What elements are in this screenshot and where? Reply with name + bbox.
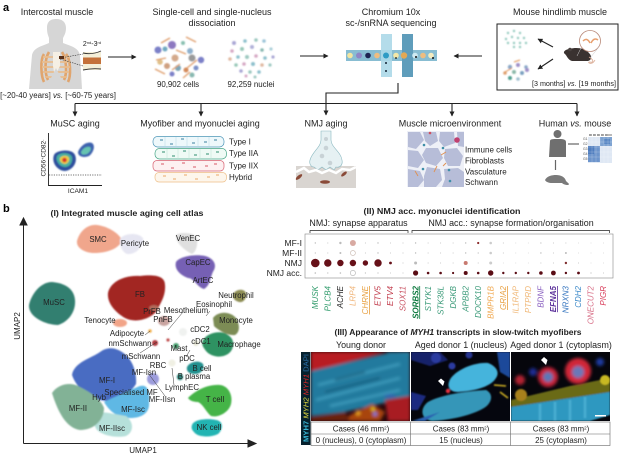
column title: young: Young donor	[336, 340, 386, 350]
cluster labels: Pericyte	[121, 239, 149, 248]
plot frame	[305, 234, 613, 278]
heading: MuSC aging: MuSC aging	[50, 118, 100, 128]
fiber: type IIA	[155, 148, 226, 159]
panel: UMAP atlas	[13, 209, 261, 455]
gene labels: CHRNE	[361, 285, 370, 314]
cluster labels: SMC	[89, 235, 107, 244]
cluster labels: ArtEC	[193, 276, 214, 285]
y label: CD82	[40, 140, 48, 158]
cluster labels: Macrophage	[217, 340, 261, 349]
fiber: type IIX	[153, 160, 224, 171]
gene labels: SOX11	[399, 286, 408, 311]
gene labels: STYK1	[424, 286, 433, 311]
cluster labels: Eosinophil	[196, 300, 232, 309]
icon: neuromuscular junction	[295, 131, 356, 188]
gene labels: IL1RAP	[512, 285, 520, 314]
heading: intercostal muscle: Intercostal muscle	[21, 7, 93, 17]
gene labels	[311, 285, 608, 324]
label: vasculature: Vasculature	[465, 168, 507, 176]
cluster labels: MF-Isc	[121, 405, 145, 414]
axis label UMAP2: UMAP2	[13, 312, 22, 340]
brackets	[310, 230, 610, 233]
label: fibroblasts: Fibroblasts	[465, 156, 504, 166]
panel label b: b	[3, 203, 10, 215]
panel: intercostal muscle	[0, 7, 116, 100]
table row 1: 2	[484, 426, 487, 430]
gene labels: BMPR1B	[486, 285, 495, 319]
gene labels: PLCB4	[324, 285, 332, 311]
table row 2: 0 (nucleus), 0 (cytoplasm)	[316, 436, 407, 445]
cluster labels: cDC2	[190, 325, 210, 334]
gene labels: EFNA5	[549, 285, 558, 312]
gene labels: NRXN3	[562, 285, 571, 313]
panel: human vs mouse	[539, 118, 612, 185]
gene labels: ETV5	[374, 285, 383, 306]
column title: aged cytoplasm: Aged donor 1 (cytoplasm)	[510, 340, 612, 350]
cluster labels: PrFB	[143, 307, 161, 316]
heading line 2: dissociation	[188, 18, 236, 28]
gene labels: ACHE	[336, 285, 345, 309]
row labels	[267, 238, 302, 278]
row labels: MF-I	[285, 238, 302, 248]
UMAP clusters	[29, 225, 246, 437]
icon: nuclei cloud	[228, 38, 275, 78]
panel: myofiber aging	[140, 118, 260, 182]
gene labels: MUSK	[311, 285, 320, 309]
table row 2: 15 (nucleus)	[439, 436, 483, 445]
panel label a: a	[3, 2, 10, 14]
label: rib level: 2	[83, 41, 87, 48]
channel legend strip: MYH7 MYH2 MYH1 DAPI	[304, 354, 310, 442]
cluster labels: MF-IIsn	[149, 395, 175, 404]
fiber: hybrid	[155, 172, 226, 182]
link human heatmap	[568, 143, 579, 145]
label: rib level: nd	[87, 40, 91, 45]
cluster labels: cDC1	[191, 337, 211, 346]
label: type IIA: Type IIA	[229, 149, 259, 158]
arrow	[300, 55, 328, 57]
cluster labels: NK cell	[197, 423, 222, 432]
heading: chromium: Chromium 10x	[362, 7, 421, 17]
panel: muscle microenvironment	[399, 118, 512, 187]
table row 2: 25 (cytoplasm)	[535, 436, 587, 445]
icon: muscle cross-section	[407, 131, 464, 187]
cluster labels: Specialised MF	[104, 388, 158, 397]
cluster labels: MF-IIsc	[99, 424, 125, 433]
micrograph: young donor	[311, 352, 410, 421]
gene labels: DGKB	[449, 285, 458, 309]
cluster labels: Neutrophil	[218, 291, 254, 300]
y label: -	[40, 139, 45, 141]
cluster labels	[43, 234, 261, 433]
table row 1: )	[387, 424, 390, 434]
icon: human torso with ribs	[29, 19, 83, 89]
panel: mouse hindlimb	[497, 7, 618, 90]
cluster labels: pDC	[179, 354, 195, 363]
gene labels: CDH2	[574, 285, 583, 308]
cluster labels: B cell	[192, 364, 212, 373]
icon: gray mouse	[545, 175, 569, 185]
channel legend strip	[301, 352, 310, 445]
cluster labels: Hyb	[92, 393, 107, 402]
axis label UMAP1: UMAP1	[129, 446, 157, 455]
micrograph: aged cytoplasm	[511, 352, 610, 421]
scale bar	[595, 415, 606, 416]
heading: NMJ aging: NMJ aging	[304, 118, 348, 128]
arrow up-left	[538, 39, 553, 47]
group label: apparatus: NMJ: synapse apparatus	[309, 218, 408, 228]
panel: dot plot	[267, 207, 613, 324]
cluster labels: Mast	[171, 344, 188, 353]
heatmap row labels: G4	[583, 152, 588, 156]
gene labels: ETV4	[386, 285, 395, 306]
cluster labels: RBC	[150, 361, 167, 370]
table row 1	[333, 424, 590, 434]
row labels: NMJ	[285, 258, 302, 268]
heading: mouse hindlimb: Mouse hindlimb muscle	[513, 7, 607, 17]
cluster labels: mSchwann	[122, 352, 160, 361]
heatmap	[588, 135, 612, 163]
dots	[311, 240, 604, 276]
label: nuclei: 92,259 nuclei	[228, 80, 275, 89]
connector tree	[75, 83, 577, 116]
label: mouse ages: [3 months] vs. [19 months]	[532, 81, 616, 88]
table row 1: 2	[584, 426, 587, 430]
axes	[20, 218, 256, 447]
cluster labels: VenEC	[176, 234, 201, 243]
gene labels: PTPRD	[524, 286, 533, 313]
cluster labels: LymphEC	[165, 383, 199, 392]
table row 1: )	[487, 424, 490, 434]
gene labels: DOCK10	[474, 285, 483, 318]
arrow	[541, 357, 548, 365]
frame	[497, 24, 618, 90]
arrow	[108, 56, 136, 58]
heatmap row labels: G5	[583, 157, 588, 161]
gene labels: GRIA2	[499, 285, 508, 310]
table row 1: Cases (83 mm	[533, 424, 584, 434]
row labels: MF-II	[282, 248, 302, 258]
row labels: NMJ acc.	[267, 268, 302, 278]
icon: nuclei cluster	[505, 30, 527, 48]
heatmap row labels: G1	[583, 137, 588, 141]
icon: microfluidic chip	[346, 34, 437, 77]
cluster labels: Monocyte	[219, 316, 253, 325]
icon: cell cloud	[154, 37, 204, 78]
panel: micrographs	[301, 328, 612, 446]
heading: dissociation: Single-cell and single-nucleus	[152, 7, 272, 17]
label: rib level: rd	[98, 40, 101, 45]
icon: mouse	[564, 48, 595, 63]
table	[311, 422, 610, 446]
arrow	[438, 378, 444, 386]
cluster labels: MF-Isn	[132, 368, 156, 377]
y label: +	[40, 157, 45, 160]
cluster labels: PnFB	[153, 315, 173, 324]
panel: NMJ aging	[295, 118, 356, 188]
heading: myofiber: Myofiber and myonuclei aging	[140, 118, 260, 128]
panel: MuSC aging	[40, 118, 102, 195]
cluster labels: MF-I	[99, 376, 115, 385]
density plot	[48, 133, 102, 186]
fiber: type I	[153, 136, 224, 147]
gene labels: STK38L	[436, 286, 445, 315]
label: type I: Type I	[229, 138, 251, 146]
label: type IIX: Type IIX	[229, 162, 259, 170]
table row 1: )	[587, 424, 590, 434]
leader lines	[140, 311, 210, 396]
cluster labels: FB	[135, 290, 145, 299]
label: age groups: [~20-40 years] vs. [~60-75 years]	[0, 91, 116, 100]
label: schwann: Schwann	[465, 178, 498, 187]
heading: NMJ identification: (II) NMJ acc. myonuclei identification	[364, 207, 521, 216]
heading line 2: sc-/snRNA sequencing	[345, 18, 437, 28]
heading: microenvironment: Muscle microenvironment	[399, 118, 502, 128]
heading: human vs mouse: Human vs. mouse	[539, 118, 611, 128]
label: hybrid: Hybrid	[229, 173, 252, 182]
column title: aged nucleus: Aged donor 1 (nucleus)	[415, 340, 507, 350]
table row 2	[316, 436, 587, 445]
heading: MYH1: (III) Appearance of MYH1 transcripts in slow-twitch myofibers	[334, 328, 582, 337]
heatmap row labels: G2	[583, 142, 588, 146]
icon: muscle band	[83, 51, 101, 70]
cluster labels: MF-II	[69, 404, 87, 413]
cluster labels: Tenocyte	[84, 316, 116, 325]
gene labels: BDNF	[537, 285, 546, 308]
x label: ICAM1	[68, 188, 88, 195]
icon: muscle magnifier	[577, 30, 600, 58]
label: cells: 90,902 cells	[157, 80, 199, 89]
cluster labels: nmSchwann	[109, 339, 151, 348]
gene labels: ONECUT2	[587, 285, 596, 324]
link human mouse	[554, 160, 556, 170]
panel: dissociation	[152, 7, 275, 89]
table row 1: Cases (83 mm	[433, 424, 484, 434]
gene labels: APBB2	[461, 285, 470, 313]
cluster labels: T cell	[206, 395, 225, 404]
panel: sequencing	[345, 7, 437, 77]
icon: person	[549, 130, 566, 157]
arrow down-left	[538, 59, 553, 69]
cluster labels: MuSC	[43, 298, 65, 307]
icon: cell cluster	[503, 60, 529, 81]
y label: CD56	[40, 160, 48, 176]
gene labels: LRP4	[349, 285, 358, 306]
cluster labels: CapEC	[185, 258, 211, 267]
cluster labels: B plasma	[178, 372, 211, 381]
gene labels: SORBS2	[411, 285, 420, 319]
micrograph: aged nucleus	[411, 352, 510, 421]
arrow	[454, 55, 482, 57]
table row 1: Cases (46 mm	[333, 424, 384, 434]
label: rib level: -3	[91, 41, 98, 48]
cluster labels: Mesothelium	[164, 306, 208, 315]
heatmap row labels: G3	[583, 147, 588, 151]
gene labels: PIGR	[599, 286, 608, 306]
label: immune cells: Immune cells	[465, 146, 512, 154]
cluster labels: Adipocyte	[110, 329, 144, 338]
heading: atlas: (I) Integrated muscle aging cell atlas	[50, 209, 204, 218]
table row 1: 2	[384, 426, 387, 430]
group label: organisation: NMJ acc.: synapse formation/organisation	[428, 218, 594, 228]
